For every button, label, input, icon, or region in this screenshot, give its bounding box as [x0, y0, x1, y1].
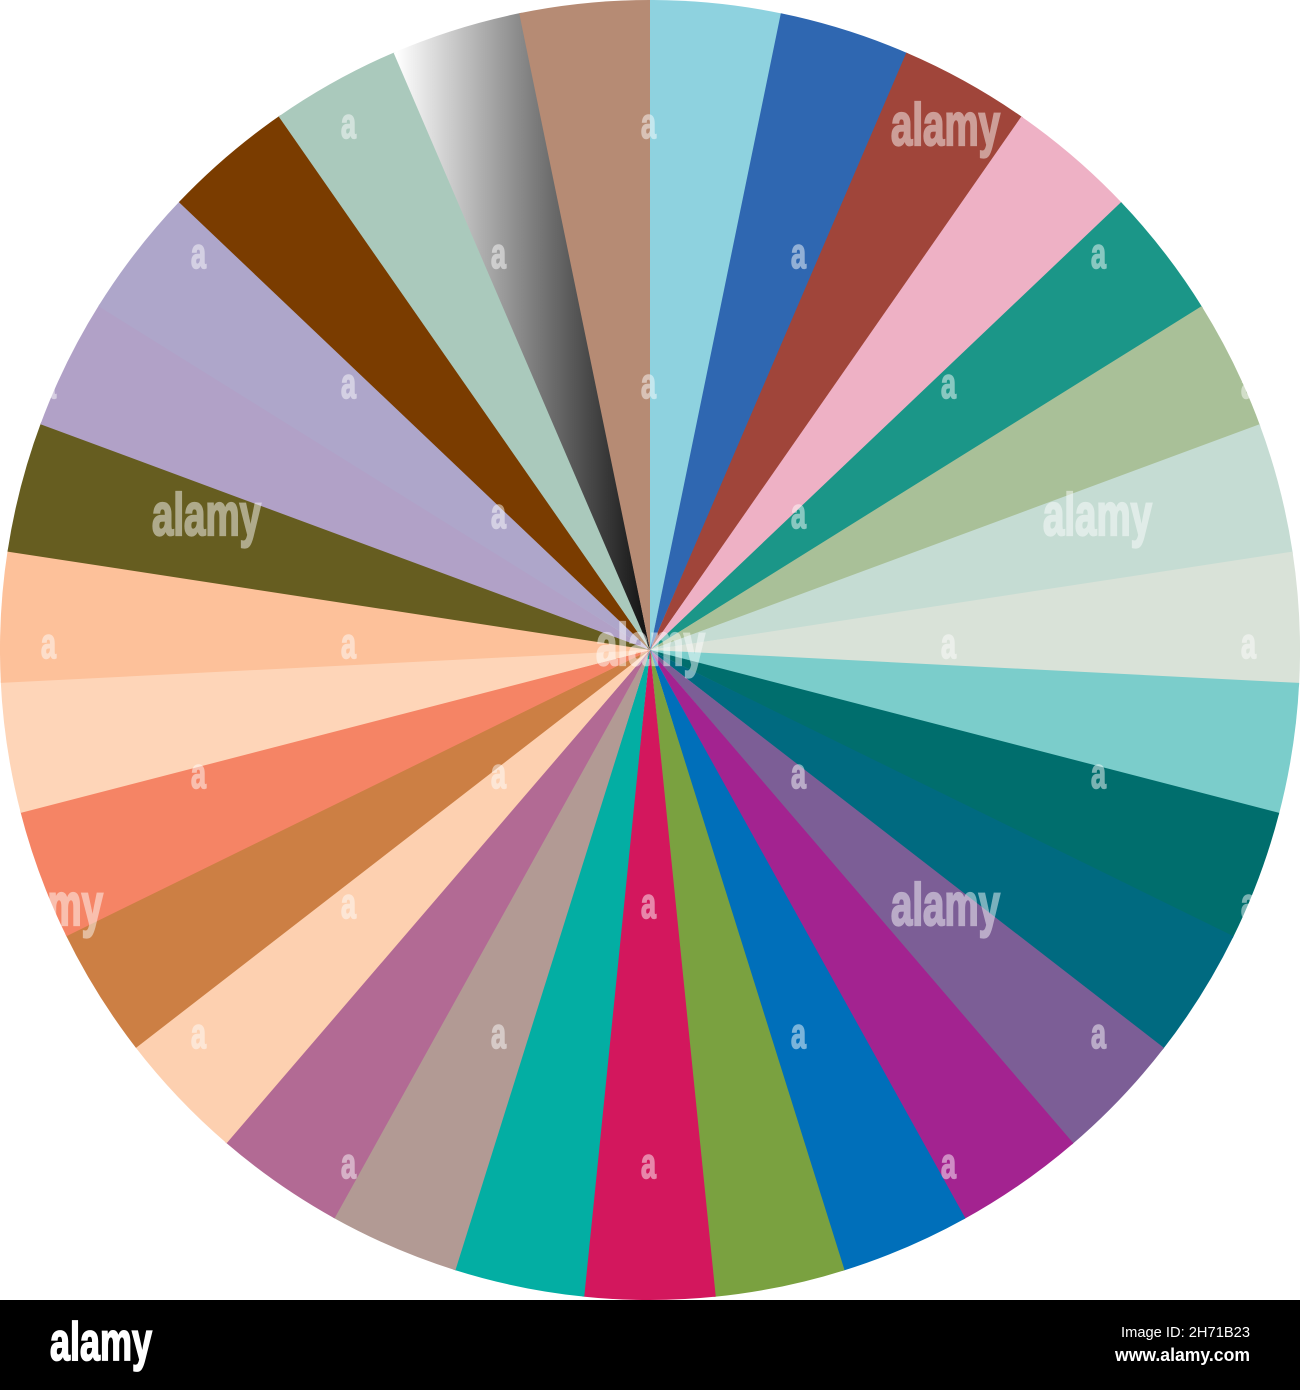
- watermark: repeated alamy marks: a: [791, 490, 807, 538]
- slice 11: petrol blue: [591, 650, 1234, 1056]
- slice 15: green: [523, 650, 845, 1310]
- watermark: repeated alamy marks: a: [41, 360, 57, 408]
- slice 10: dark teal: [617, 650, 1279, 942]
- watermark: repeated alamy marks: a: [341, 620, 357, 668]
- watermark: repeated alamy marks: a: [791, 750, 807, 798]
- watermark: repeated alamy marks: a: [791, 230, 807, 278]
- slice 1: light blue: [647, 0, 783, 650]
- slice 19: mauve: [218, 586, 650, 1218]
- watermark: repeated alamy marks: a: [791, 1010, 807, 1058]
- slice 14: bright blue: [534, 650, 965, 1283]
- slice 7: pale green: [650, 424, 1300, 775]
- watermark: repeated alamy marks: a: [341, 1140, 357, 1188]
- watermark: repeated alamy marks: alamy: [596, 612, 705, 678]
- slice 12: purple: [569, 650, 1164, 1153]
- slice 26: lilac: [40, 300, 696, 650]
- watermark: repeated alamy marks: a: [191, 230, 207, 278]
- slice 30: white to black gradient: [394, 13, 650, 650]
- slice 8: pale grey green: [650, 552, 1300, 781]
- watermark: repeated alamy marks: a: [641, 100, 657, 148]
- watermark: repeated alamy marks: [0, 92, 1257, 1188]
- watermark: repeated alamy marks: a: [491, 750, 507, 798]
- watermark: repeated alamy marks: a: [491, 230, 507, 278]
- footer bar: [0, 1300, 1300, 1390]
- watermark: repeated alamy marks: a: [341, 880, 357, 928]
- slice 25: olive: [7, 420, 670, 650]
- slice 20: peach: [126, 563, 650, 1143]
- slice 2: blue: [650, 13, 911, 677]
- slice 23: light peach: [0, 521, 650, 813]
- watermark: repeated alamy marks: a: [641, 1140, 657, 1188]
- watermark: repeated alamy marks: a: [1091, 230, 1107, 278]
- watermark: repeated alamy marks: a: [1091, 750, 1107, 798]
- slice 27: lavender: [98, 193, 720, 650]
- website: www.alamy.com: [1114, 1345, 1250, 1365]
- watermark: repeated alamy marks: a: [941, 620, 957, 668]
- slice 17: turquoise: [452, 637, 650, 1297]
- image id: Image ID: 2H71B23: [1121, 1324, 1250, 1341]
- slice 31: tan: [519, 0, 650, 650]
- slice 21: ochre: [55, 545, 650, 1048]
- watermark: repeated alamy marks: a: [1091, 1010, 1107, 1058]
- watermark: repeated alamy marks: a: [191, 750, 207, 798]
- slice 18: taupe: [329, 610, 650, 1270]
- slice 16: crimson: [518, 650, 716, 1310]
- watermark: repeated alamy marks: a: [191, 1010, 207, 1058]
- watermark: repeated alamy marks: alamy: [891, 872, 1000, 938]
- slice 4: pink: [650, 117, 1130, 726]
- footer logo: alamy: [50, 1312, 152, 1372]
- watermark: repeated alamy marks: a: [1241, 880, 1257, 928]
- slice 29: grey green: [279, 41, 759, 650]
- watermark: repeated alamy marks: a: [491, 490, 507, 538]
- slice 22: salmon: [8, 531, 650, 936]
- watermark: repeated alamy marks: a: [1241, 360, 1257, 408]
- watermark: repeated alamy marks: a: [341, 360, 357, 408]
- slice 9: aqua: [643, 650, 1299, 816]
- watermark: repeated alamy marks: a: [1241, 620, 1257, 668]
- slice 6: sage: [650, 306, 1272, 763]
- slice 3: brick red: [650, 53, 1028, 702]
- watermark: repeated alamy marks: alamy: [1043, 482, 1152, 548]
- slice 24: apricot: [0, 517, 650, 683]
- watermark: repeated alamy marks: a: [341, 100, 357, 148]
- slice 28: brown: [179, 106, 742, 650]
- watermark: repeated alamy marks: alamy: [152, 482, 261, 548]
- watermark: repeated alamy marks: alamy: [891, 92, 1000, 158]
- slice 13: magenta: [549, 650, 1073, 1230]
- watermark: repeated alamy marks: a: [491, 1010, 507, 1058]
- watermark: repeated alamy marks: a: [641, 360, 657, 408]
- watermark: repeated alamy marks: a: [41, 620, 57, 668]
- slice 5: teal green: [650, 202, 1213, 746]
- watermark: repeated alamy marks: a: [941, 360, 957, 408]
- watermark: repeated alamy marks: a: [941, 1140, 957, 1188]
- watermark: repeated alamy marks: a: [641, 880, 657, 928]
